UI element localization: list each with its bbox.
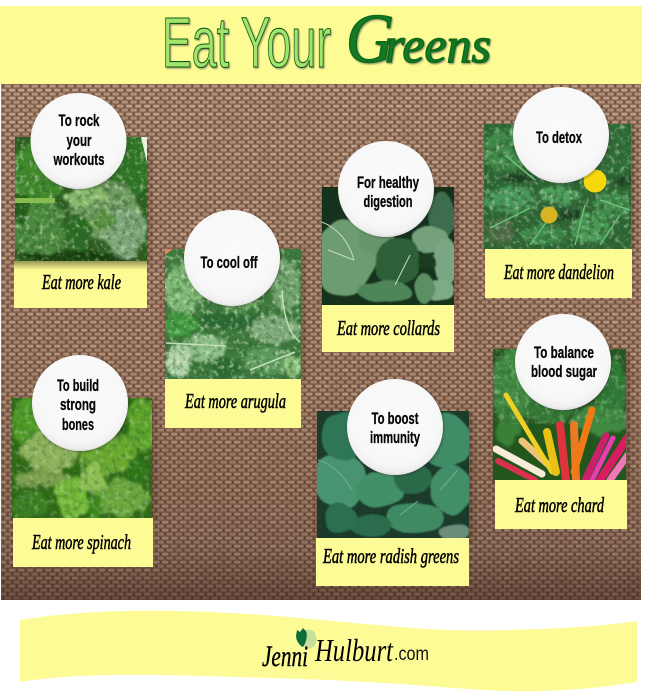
badge: For healthy digestion: For healthy (357, 173, 419, 192)
label note: Eat more dandelion (485, 249, 632, 298)
badge: For healthy digestion: digestion (364, 192, 412, 211)
label note: Eat more arugula: Eat more arugula (184, 389, 286, 413)
badge: To balance blood sugar (515, 314, 611, 410)
title banner (0, 1, 642, 84)
badge: To balance blood sugar: To balance (534, 343, 594, 362)
photo: kale leaves (10, 133, 152, 264)
badge: To rock your workouts: To rock (58, 111, 100, 130)
badge: To boost immunity: To boost (372, 409, 419, 428)
badge: To cool off: To cool off (200, 253, 258, 272)
badge: To build strong bones: bones (62, 415, 94, 434)
title: Eat Your Greens: G (346, 1, 394, 78)
label note: Eat more radish greens: Eat more radish greens (322, 544, 459, 568)
icon: leaf (296, 628, 316, 648)
badge: To rock your workouts (30, 93, 126, 189)
card: arugula (162, 210, 302, 428)
label note: Eat more chard: Eat more chard (514, 493, 604, 517)
card: kale (10, 93, 152, 308)
icon: dandelion flowers (540, 170, 606, 224)
badge: To rock your workouts: workouts (53, 150, 104, 169)
photo: spinach leaves (12, 394, 158, 520)
logo: JenniHulburt.com (262, 628, 429, 673)
badge: To build strong bones: strong (60, 395, 96, 414)
photo: arugula leaves (162, 249, 302, 379)
card: collards (315, 141, 458, 352)
footer banner (20, 611, 637, 691)
photo: collard leaves (315, 187, 458, 305)
badge: To boost immunity: immunity (370, 428, 420, 447)
photo: dandelion in grass (483, 124, 633, 249)
badge: To boost immunity (347, 379, 443, 475)
label note: Eat more collards (322, 305, 454, 352)
badge: For healthy digestion (338, 141, 434, 237)
badge: To build strong bones: To build (57, 376, 99, 395)
badge: To detox: To detox (536, 128, 582, 147)
photo: rainbow chard (491, 349, 630, 480)
title: Eat Your Greens: reens (385, 17, 491, 73)
card: spinach (12, 355, 158, 567)
badge: To build strong bones (32, 355, 128, 451)
logo: JenniHulburt.com: .com (394, 644, 429, 665)
logo: JenniHulburt.com: Jenni (262, 640, 308, 673)
label note: Eat more arugula (165, 379, 301, 428)
label note: Eat more chard (495, 480, 627, 529)
badge: To cool off (184, 210, 280, 306)
title: Eat Your Greens: Eat Your (162, 4, 331, 83)
burlap background (1, 84, 641, 600)
label note: Eat more kale: Eat more kale (41, 270, 121, 294)
logo: JenniHulburt.com: Hulburt (314, 632, 394, 668)
badge: To balance blood sugar: blood sugar (531, 362, 597, 381)
label note: Eat more kale (14, 261, 147, 308)
badge: To detox (513, 87, 609, 183)
photo: radish leaves (313, 411, 474, 539)
label note: Eat more radish greens (316, 538, 469, 586)
label note: Eat more spinach: Eat more spinach (31, 530, 131, 554)
card: chard (491, 314, 630, 529)
card: radish greens (313, 379, 474, 586)
label note: Eat more collards: Eat more collards (336, 316, 440, 340)
label note: Eat more spinach (13, 518, 153, 567)
card: dandelion (483, 87, 633, 298)
badge: To rock your workouts: your (66, 131, 92, 150)
